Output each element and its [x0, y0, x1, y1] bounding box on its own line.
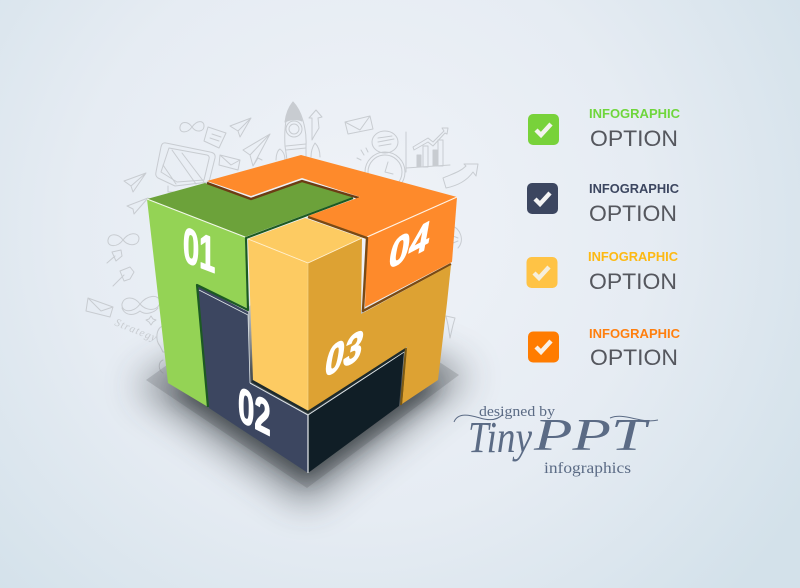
label: INFOGRAPHIC — [589, 327, 680, 341]
icon: plane left 2 — [127, 198, 148, 214]
icon: small plane — [230, 118, 251, 137]
icon: orange check — [528, 332, 559, 362]
3D puzzle cube — [147, 155, 457, 473]
icon: smile circle — [452, 226, 461, 248]
icon: envelope left — [219, 155, 240, 170]
icon: envelope left lower — [86, 298, 113, 317]
option 4: OPTION — [590, 345, 678, 370]
label: INFOGRAPHIC — [588, 250, 678, 264]
option 2 — [527, 182, 679, 226]
piece 01: green block — [147, 180, 353, 407]
logo: designed by Tiny PPT infographics: Tiny — [468, 413, 532, 462]
icon: curved arrow — [443, 164, 478, 188]
icon: clock — [357, 148, 405, 192]
doodle sketches behind cube — [86, 102, 478, 373]
icon: yellow check — [526, 257, 558, 288]
number 03: 03 — [321, 319, 367, 388]
logo: designed by Tiny PPT infographics — [454, 404, 658, 477]
option 4 — [528, 327, 680, 370]
icon: growth chart — [406, 128, 450, 172]
piece 03: yellow and gold block — [248, 218, 451, 412]
logo: designed by Tiny PPT infographics: PPT — [533, 409, 651, 460]
option 1 — [528, 107, 680, 151]
number 02: 02 — [238, 375, 271, 447]
icon: note — [204, 127, 226, 148]
cube shadow — [135, 270, 470, 505]
icon: star — [146, 316, 156, 325]
icon: infinity left — [108, 234, 139, 246]
icon: green check — [528, 114, 559, 145]
icon: bulb — [157, 326, 168, 352]
icon: rocket — [276, 102, 322, 160]
icon: big plane — [243, 134, 270, 166]
icon: navy check — [527, 183, 558, 214]
number 01: 01 — [183, 215, 215, 284]
icon: pin 2 — [113, 267, 134, 286]
piece 04: orange block — [207, 155, 457, 311]
option 2: OPTION — [589, 201, 677, 226]
number 04: 04 — [385, 210, 435, 279]
logo: designed by Tiny PPT infographics: infographics — [544, 460, 631, 477]
icon: monitor — [156, 143, 215, 192]
option 3: OPTION — [589, 269, 677, 294]
icon: bulb lower — [159, 360, 163, 373]
icon: plane left 1 — [124, 173, 146, 192]
piece 02: navy block — [197, 285, 404, 473]
icon: pin 1 — [107, 250, 122, 263]
option 1: OPTION — [590, 126, 678, 151]
logo: designed by Tiny PPT infographics: designed by — [479, 404, 556, 420]
icon: infinity large — [122, 296, 160, 314]
icon: speech bubble — [372, 131, 398, 153]
label: INFOGRAPHIC — [589, 182, 679, 196]
icon: infinity top — [180, 122, 204, 132]
option 3 — [526, 250, 678, 294]
icon: envelope right — [345, 116, 373, 134]
icon: pin right — [446, 316, 455, 338]
label: INFOGRAPHIC — [589, 107, 680, 121]
text: strategy: Strategy — [113, 317, 158, 344]
